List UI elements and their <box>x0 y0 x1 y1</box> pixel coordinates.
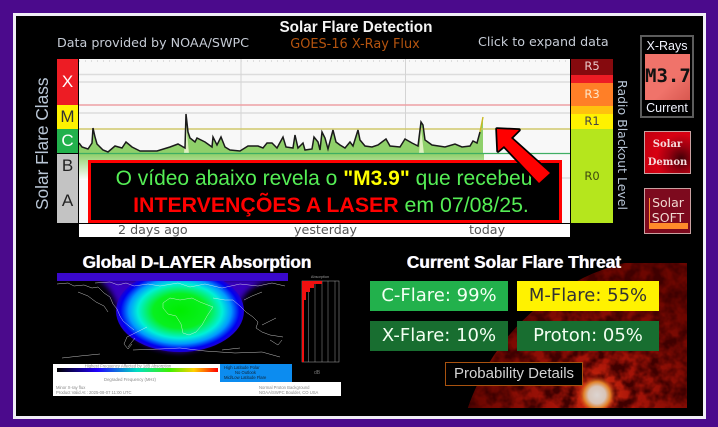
daylit region <box>97 279 278 352</box>
top polar band <box>57 273 288 281</box>
class C: C <box>61 131 74 150</box>
callout line 1: O vídeo abaixo revela o "M3.9" que recebeu <box>116 167 532 190</box>
legend: Product Valid At : 2025-08-07 11:00 UTC <box>56 390 132 395</box>
badge: Proton: Proton: 05% <box>533 325 643 346</box>
axis label: Radio Blackout Level: Radio Blackout Level <box>615 80 630 210</box>
orange bracket <box>649 198 688 229</box>
callout line 2: INTERVENÇÕES A LASER em 07/08/25. <box>133 193 529 217</box>
legend: Degraded Frequency (MHz) <box>104 377 157 382</box>
label: Solar: Solar <box>653 139 682 150</box>
R1: R1 <box>584 114 600 128</box>
badge: C-Flare <box>370 281 508 311</box>
absorption profile panel: Absorption <box>311 275 329 279</box>
badge: M-Flare: M-Flare: 55% <box>529 285 647 306</box>
class A: A <box>62 191 73 210</box>
label: today: today <box>469 222 505 237</box>
legend: Normal Proton Background <box>259 385 310 390</box>
time axis <box>79 224 570 237</box>
button: Solar Demon <box>644 131 691 174</box>
text: data source: Data provided by NOAA/SWPC <box>57 35 249 50</box>
absorption profile panel: dB <box>314 370 321 376</box>
legend <box>53 364 341 396</box>
legend: High Latitude Polar <box>224 365 260 370</box>
R5 <box>571 59 613 75</box>
R0: R0 <box>584 169 600 183</box>
label: Solar SOFT: Solar <box>652 195 684 210</box>
class M <box>57 105 78 129</box>
legend: No Outlook <box>235 370 257 375</box>
label: 2 days ago: 2 days ago <box>118 222 188 237</box>
image: solar surface background <box>468 263 687 408</box>
label: yesterday: yesterday <box>294 222 357 237</box>
flux line <box>79 114 480 152</box>
heading: Current Solar Flare Threat: Current Solar Flare Threat <box>407 252 621 272</box>
absorption profile panel <box>302 275 339 376</box>
legend: NOAA/SWPC Boulder, CO USA <box>259 390 319 395</box>
title: Solar Flare Detection: Solar Flare Detection <box>279 19 432 36</box>
class M: M <box>60 107 75 126</box>
class A <box>57 178 78 223</box>
class X <box>57 59 78 105</box>
badge: X-Flare: X-Flare: 10% <box>382 325 496 346</box>
heading: Global D-LAYER Absorption: Global D-LAYER Absorption <box>83 252 311 272</box>
legend: Highest Frequency Affected by 1dB Absorption <box>85 364 172 368</box>
value tile: M3.7: M3.7 <box>645 65 691 87</box>
class C <box>57 129 78 153</box>
legend: Mid/Low Latitude Flare <box>224 375 267 380</box>
panel: X-Rays current <box>640 35 694 118</box>
label: Solar SOFT <box>652 195 684 225</box>
R3 <box>571 83 613 106</box>
chart: GOES X-ray flux <box>79 59 570 223</box>
flare class scale <box>57 59 78 223</box>
arrow: pointing to flare peak <box>495 127 550 183</box>
text: click to expand: Click to expand data <box>478 34 609 49</box>
badge: X-Flare <box>370 321 508 351</box>
badge: Proton <box>517 321 659 351</box>
badge: M-Flare <box>517 281 659 311</box>
R4 band <box>571 75 613 83</box>
button: Probability Details: Probability Details <box>454 365 574 382</box>
label: Solar SOFT: SOFT <box>652 210 684 225</box>
label: Demon: Demon <box>648 157 687 168</box>
class X: X <box>62 72 73 91</box>
flux area fill <box>79 114 483 154</box>
label: Current: Current <box>646 101 688 115</box>
R5: R5 <box>584 59 600 73</box>
coastlines <box>57 282 285 358</box>
callout: video announcement <box>88 160 562 223</box>
button: Probability Details <box>445 362 583 386</box>
class B: B <box>62 156 73 175</box>
badge: C-Flare: C-Flare: 99% <box>381 285 497 306</box>
axis label: Solar Flare Class: Solar Flare Class <box>32 77 52 210</box>
value tile: M3.7 <box>645 54 690 100</box>
legend: Minor X-ray flux <box>56 385 86 390</box>
R0 <box>571 129 613 223</box>
label: X-Rays: X-Rays <box>646 39 687 53</box>
R3: R3 <box>584 87 600 101</box>
button: Solar SOFT <box>644 188 691 234</box>
subtitle: GOES-16 X-Ray Flux: GOES-16 X-Ray Flux <box>290 37 420 52</box>
R1 <box>571 114 613 129</box>
map: D-layer absorption <box>53 273 341 396</box>
R2 band <box>571 106 613 114</box>
class B <box>57 154 78 178</box>
radio blackout scale <box>571 59 613 223</box>
